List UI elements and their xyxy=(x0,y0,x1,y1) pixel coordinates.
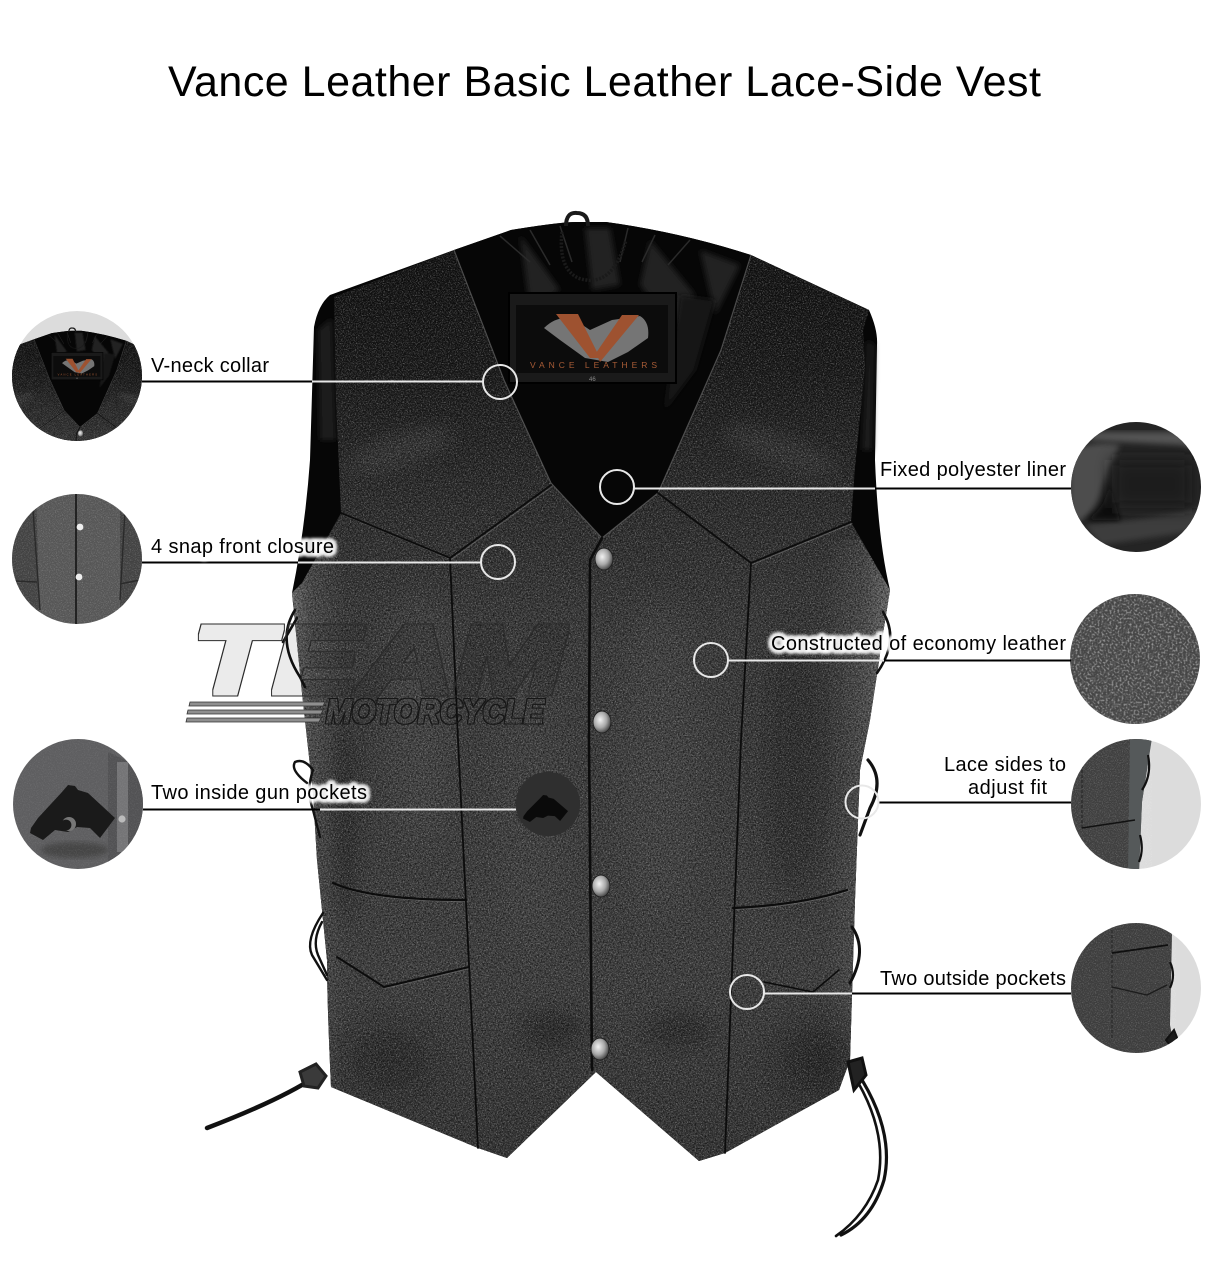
ring marker xyxy=(600,470,634,504)
label: Constructed of economy leather xyxy=(771,633,1066,655)
left callout: 4 snap front closure xyxy=(10,492,515,626)
label: V-neck collar xyxy=(151,355,269,377)
connector line xyxy=(728,660,1071,662)
connector line xyxy=(142,380,483,382)
label: Lace sides to xyxy=(944,754,1066,776)
ring marker xyxy=(481,545,515,579)
liner silhouette xyxy=(292,222,890,1161)
brand label patch: VANCE LEATHERS xyxy=(530,360,657,370)
label: Constructed of economy leather xyxy=(771,633,1066,655)
brand label patch: 46 xyxy=(589,377,596,383)
side lacing and drawstrings xyxy=(207,610,890,1236)
left callout: two inside gun pockets xyxy=(10,736,516,872)
liner side strips xyxy=(318,318,874,450)
label: Two inside gun pockets xyxy=(151,782,367,804)
thumbnail: collar xyxy=(12,311,142,441)
TEAM Motorcycle watermark: MOTORCYCLE xyxy=(326,693,545,731)
right callout: constructed of economy leather xyxy=(694,592,1202,726)
speed stripes xyxy=(186,702,325,722)
label xyxy=(944,754,1066,799)
icon: pistol xyxy=(30,785,115,840)
thumbnail: outside pocket xyxy=(1068,920,1204,1056)
connector line xyxy=(142,562,481,564)
ring marker xyxy=(846,786,878,818)
TEAM Motorcycle watermark xyxy=(186,607,567,731)
connector line xyxy=(764,992,1071,994)
snap buttons xyxy=(591,548,613,1060)
thumbnail: snaps xyxy=(10,492,144,626)
label: adjust fit xyxy=(968,777,1047,799)
neck drawstring xyxy=(561,213,626,280)
thumbnail: leather grain xyxy=(1068,592,1202,726)
leather vest photo xyxy=(207,213,895,1236)
gun pocket badge on vest xyxy=(516,770,580,838)
ring marker xyxy=(694,643,728,677)
label: Two outside pockets xyxy=(880,968,1066,990)
right callout: fixed polyester liner xyxy=(600,421,1202,553)
icon: pistol xyxy=(523,795,568,822)
V logo xyxy=(556,314,639,362)
brand label patch xyxy=(509,293,676,383)
seams and pockets xyxy=(333,485,851,1153)
label: Two inside gun pockets xyxy=(151,782,367,804)
thumbnail: laced side xyxy=(1068,736,1204,872)
right callout: two outside pockets xyxy=(730,920,1204,1056)
engine logo xyxy=(544,316,648,362)
thumbnail: liner fabric xyxy=(1070,421,1202,553)
leather front panels xyxy=(285,245,895,1165)
connector line xyxy=(634,488,1071,490)
label: 4 snap front closure xyxy=(151,536,334,558)
connector line xyxy=(879,802,1071,804)
right callout: lace sides xyxy=(846,736,1204,872)
TEAM Motorcycle watermark: TEAM xyxy=(192,607,567,714)
connector line xyxy=(143,808,516,810)
title: Vance Leather Basic Leather Lace-Side Vest xyxy=(168,58,1041,106)
thumbnail: pistol in pocket xyxy=(10,736,146,872)
left callout: V-neck collar xyxy=(12,311,518,441)
neck edge highlight xyxy=(454,250,751,538)
nylon liner folds in neck xyxy=(450,215,760,545)
ring marker xyxy=(483,365,517,399)
label: 4 snap front closure xyxy=(151,536,334,558)
ring marker xyxy=(730,975,764,1009)
label: Fixed polyester liner xyxy=(880,459,1066,481)
seam highlights xyxy=(334,486,852,988)
